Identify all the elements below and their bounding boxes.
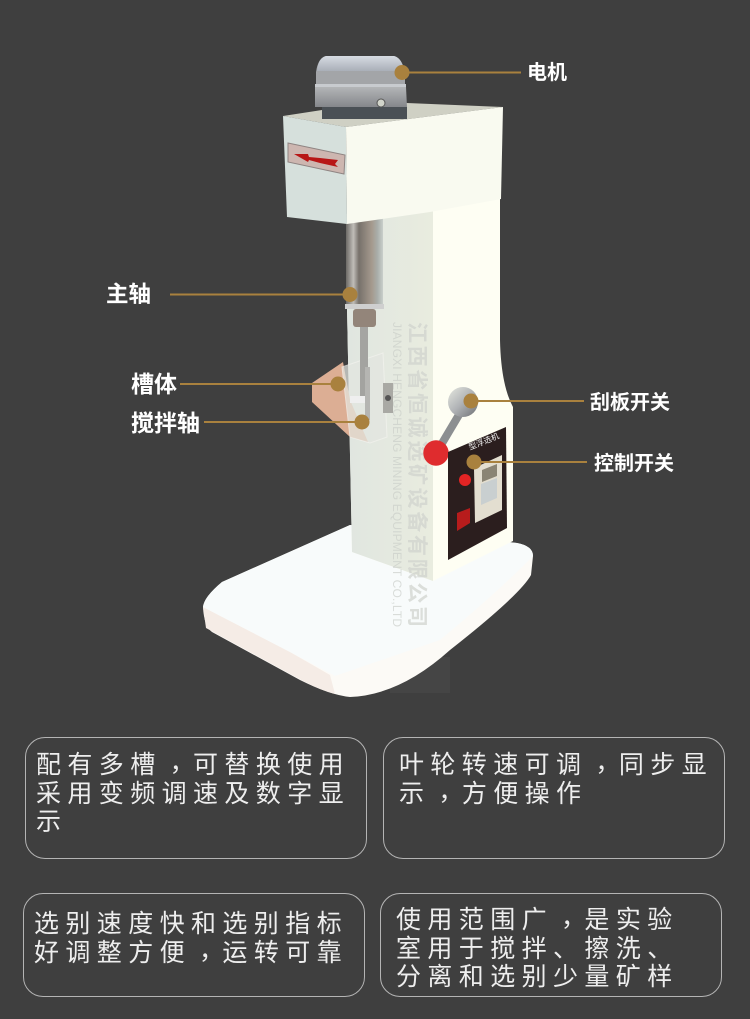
- callout: 主轴: 主轴: [106, 282, 151, 307]
- feature box 4: [380, 893, 722, 997]
- feature box 1: 示: [36, 808, 67, 836]
- spindle: [345, 214, 384, 402]
- illustration: flotation machine with callouts: [106, 56, 674, 697]
- control panel: 型浮选机: [467, 431, 500, 452]
- feature box 1: 配有多槽 ，可替换使用: [36, 749, 350, 779]
- handle: [423, 387, 478, 466]
- callout: 槽体: 槽体: [131, 371, 177, 397]
- control panel: [448, 427, 507, 560]
- feature box 4: 室用于搅拌、擦洗、: [396, 934, 679, 962]
- callout: 控制开关: 控制开关: [594, 452, 674, 475]
- feature box 3: 选别速度快和选别指标: [34, 910, 348, 938]
- machine head box: [283, 56, 503, 224]
- watermark: [390, 322, 428, 627]
- machine base: [203, 525, 533, 697]
- callout: 主轴: [106, 282, 358, 307]
- feature box 3: [23, 893, 365, 997]
- machine column: [347, 190, 513, 581]
- callout: 刮板开关: 刮板开关: [590, 391, 670, 414]
- watermark: 江西省恒诚选矿设备有限公司: [405, 322, 428, 627]
- feature box 3: 好调整方便 ，运转可靠: [34, 936, 348, 966]
- callout: 搅拌轴: 搅拌轴: [131, 410, 200, 436]
- feature box 2: [383, 737, 725, 859]
- callout: 槽体: [131, 371, 346, 397]
- feature box 1: [25, 737, 367, 859]
- tank: [312, 340, 393, 443]
- callout: 电机: [394, 61, 567, 84]
- callout: 搅拌轴: [131, 410, 370, 436]
- callout: 控制开关: [466, 452, 674, 475]
- feature box 2: 示 ，方便操作: [399, 778, 587, 808]
- watermark: JIANGXI HENGCHENG MINING EQUIPMENT CO.,LTD: [390, 322, 404, 627]
- callout: 电机: 电机: [527, 61, 567, 84]
- motor: [315, 56, 407, 119]
- feature box 4: 使用范围广 ，是实验: [396, 904, 679, 934]
- feature box 1: 采用变频调速及数字显: [36, 780, 350, 808]
- feature box 4: 分离和选别少量矿样: [396, 963, 679, 991]
- feature box 2: 叶轮转速可调 ，同步显: [399, 749, 713, 779]
- callout: 刮板开关: [464, 391, 670, 414]
